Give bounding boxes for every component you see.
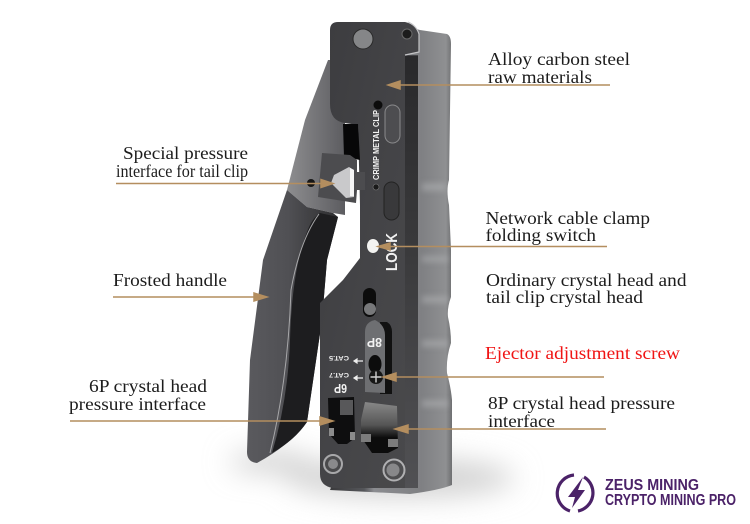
handle groove: [272, 213, 338, 453]
ejector slider: [365, 320, 385, 393]
logo: zeus mining: ZEUS MINING: [605, 477, 699, 494]
ejector screw: [369, 370, 383, 384]
cat arrows: [354, 359, 363, 380]
slider slot: [363, 288, 376, 317]
arrow: 6P: [70, 417, 333, 425]
label: alloy carbon steel: Alloy carbon steel: [488, 49, 630, 69]
crimping tool illustration: [247, 22, 452, 494]
crimp slot: [343, 124, 360, 160]
8P socket: [361, 402, 398, 453]
plate edge: [405, 22, 419, 55]
cat.5 label: CAT.5: [329, 354, 349, 361]
tail clip metal: [331, 167, 354, 198]
label: folding switch: folding switch: [486, 225, 596, 245]
tail clip block: [318, 153, 365, 203]
top bolt: [353, 29, 373, 49]
handle highlight: [270, 214, 319, 453]
cat.7 label: CAT.7: [329, 371, 349, 378]
8P label: 8P: [367, 335, 382, 350]
arrow: handle: [113, 293, 267, 301]
rear arm: [287, 60, 345, 215]
upper hole: [374, 100, 382, 110]
label: pressure interface: pressure interface: [69, 394, 206, 414]
label: raw materials: raw materials: [488, 67, 592, 87]
front plate: [320, 22, 419, 488]
arrow: tail clip: [116, 180, 333, 188]
label: special pressure: Special pressure: [123, 143, 248, 163]
arrow: alloy: [388, 81, 610, 89]
label: 8P crystal head pressure: 8P crystal head pressure: [488, 393, 675, 413]
label: network cable clamp: Network cable clamp: [486, 208, 650, 228]
ejector hole: [368, 355, 382, 373]
lock switch: [367, 239, 379, 253]
label: interface: interface: [488, 411, 555, 431]
label: ejector adjustment screw: Ejector adjustment screw: [485, 343, 680, 363]
6P label: 6P: [334, 381, 347, 396]
bottom right bolt: [384, 460, 404, 480]
logo: lightning ring: [557, 475, 593, 511]
arrow: ejector: [383, 373, 604, 381]
6P socket: [328, 397, 355, 444]
lock label: LOCK: [384, 232, 401, 271]
handle: [247, 190, 338, 463]
label: tail clip crystal head: tail clip crystal head: [486, 287, 643, 307]
slider recess: [380, 322, 392, 394]
bottom left bolt: [324, 455, 342, 473]
side channel: [405, 56, 418, 488]
slots: [385, 105, 400, 143]
crimp metal clip label: CRIMP METAL CLIP: [372, 109, 381, 180]
label: 6P crystal head: 6P crystal head: [89, 376, 207, 396]
arrow: switch: [378, 243, 607, 250]
arrow: 8P: [395, 425, 606, 433]
arm hole: [307, 179, 315, 187]
body highlight bands: [422, 183, 448, 407]
label: frosted handle: Frosted handle: [113, 270, 227, 290]
drop shadow under tool: [230, 453, 515, 498]
label: interface for tail clip: interface for tail clip: [116, 161, 248, 181]
right side body: [330, 26, 452, 494]
label: ordinary crystal head and: Ordinary crystal head and: [486, 270, 687, 290]
top screw: [402, 29, 412, 39]
lower hole: [373, 184, 379, 190]
